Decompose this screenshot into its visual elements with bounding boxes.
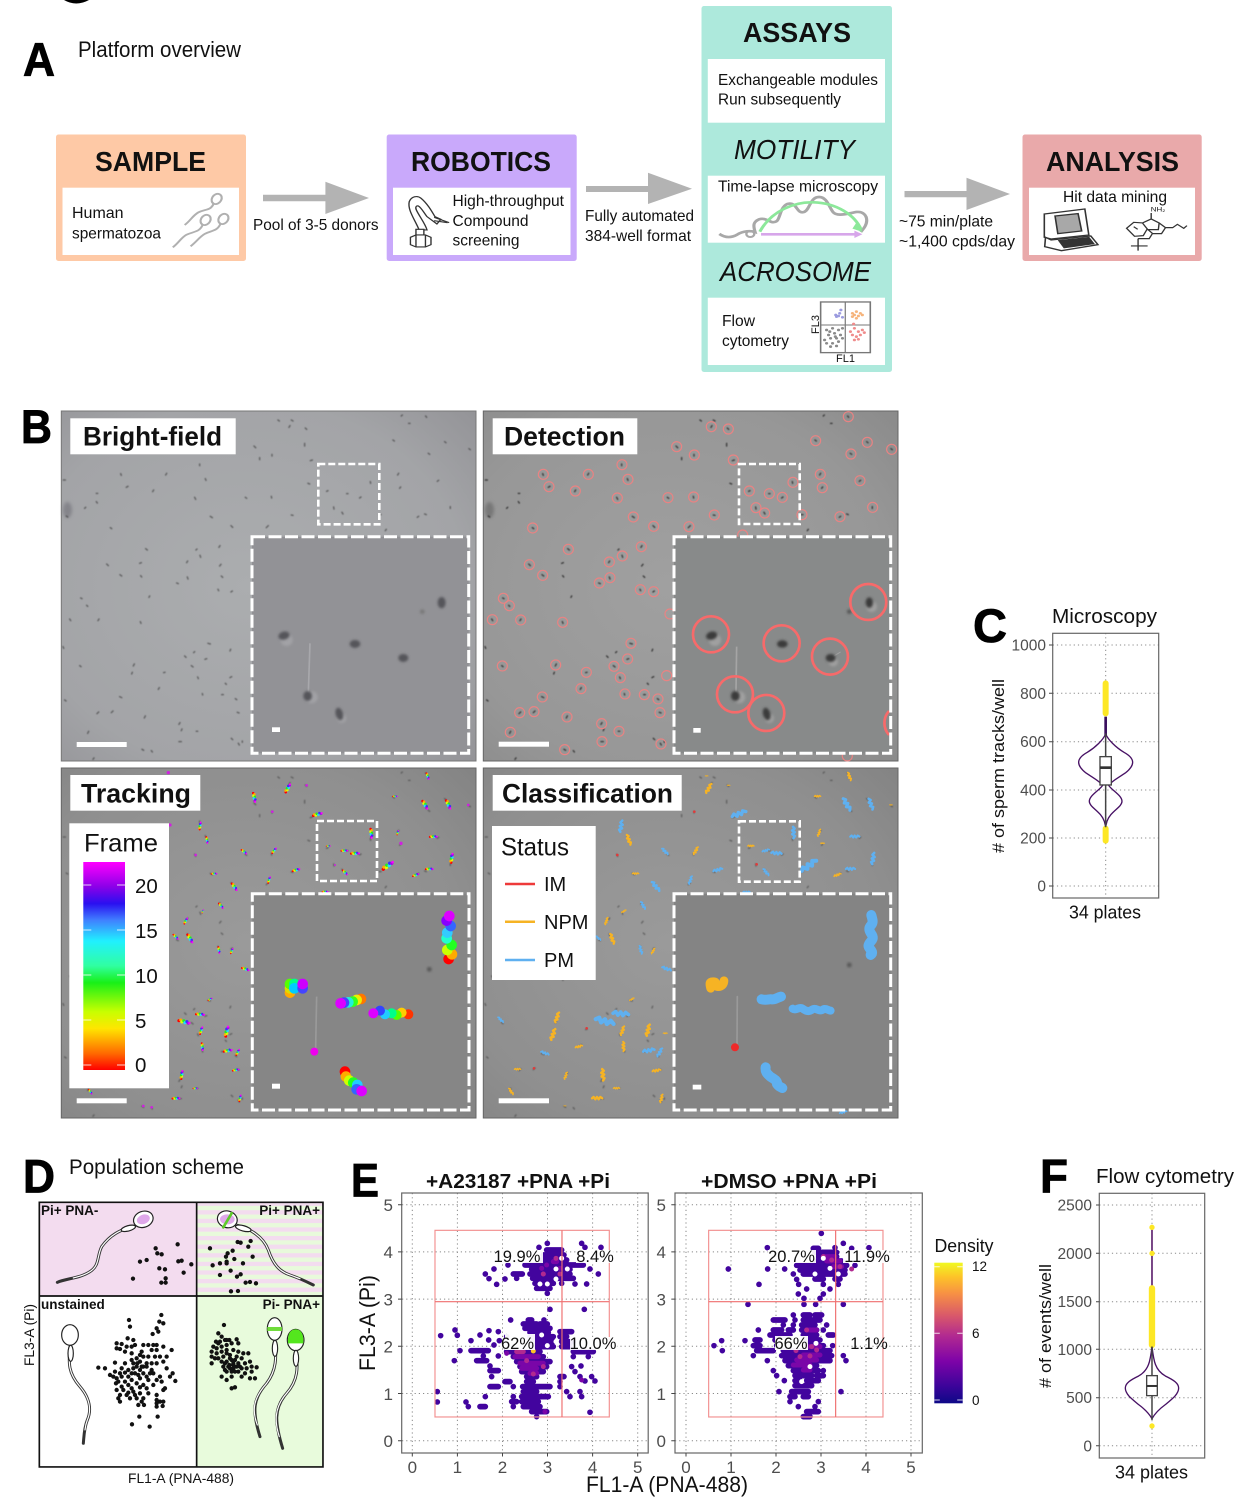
panel letter C: C bbox=[973, 599, 1007, 652]
panel letter B: B bbox=[21, 400, 52, 453]
axis tick labels: 5 bbox=[384, 1196, 393, 1215]
axis tick labels: 0 bbox=[408, 1458, 417, 1477]
y axis tick labels bbox=[1058, 1198, 1092, 1456]
legend: status: PM bbox=[544, 950, 574, 972]
axis tick labels: 2 bbox=[771, 1458, 781, 1477]
axis tick labels: 1 bbox=[453, 1458, 462, 1477]
plot title: DMSO: +DMSO +PNA +Pi bbox=[701, 1171, 877, 1193]
box: assays: Time-lapse microscopy bbox=[718, 178, 878, 196]
image: tracking bbox=[61, 768, 476, 1118]
box: robotics: Compound bbox=[452, 213, 528, 230]
icon: sperm cells bbox=[173, 192, 230, 247]
y axis tick labels: 0 bbox=[1083, 1438, 1092, 1456]
axis tick labels: 0 bbox=[657, 1432, 666, 1451]
box: robotics: High-throughput bbox=[452, 193, 565, 210]
legend: status: NPM bbox=[544, 912, 588, 934]
label: detection: Detection bbox=[504, 422, 625, 452]
y axis tick labels: 2000 bbox=[1058, 1246, 1092, 1263]
quadrant: Pi- PNA+ bbox=[197, 1296, 323, 1467]
sperm illustrations bbox=[57, 1208, 313, 1448]
arrow: robotics to assays bbox=[586, 173, 692, 204]
panel E: flow cytometry density plots bbox=[351, 1154, 994, 1497]
axis tick labels: 2 bbox=[384, 1338, 393, 1356]
icon: robot arm bbox=[409, 197, 449, 247]
heading: microscopy: Microscopy bbox=[1052, 606, 1157, 628]
arrow: sample to robotics bbox=[263, 182, 369, 214]
density plot: A23187 bbox=[398, 1193, 648, 1456]
box: sample bbox=[56, 134, 246, 261]
arrow: assays to analysis bbox=[904, 178, 1010, 210]
icon: computer bbox=[1044, 209, 1098, 251]
percentage labels bbox=[494, 1248, 617, 1353]
axis tick labels: 3 bbox=[657, 1290, 666, 1310]
image: bright-field bbox=[61, 411, 476, 761]
box: robotics: screening bbox=[452, 232, 520, 250]
box: analysis: ANALYSIS bbox=[1046, 146, 1179, 177]
label: pool of donors: Pool of 3-5 donors bbox=[253, 217, 378, 234]
x axis label: 34 plates bbox=[1069, 902, 1141, 922]
label: throughput: ~1,400 cpds/day bbox=[899, 234, 1015, 250]
hexbin points bbox=[714, 1233, 869, 1417]
quadrant chart bbox=[39, 1202, 323, 1467]
y axis tick labels: 1000 bbox=[1012, 638, 1046, 654]
legend: frame colour bar: 10 bbox=[135, 965, 158, 988]
label: fully automated: Fully automated bbox=[585, 208, 694, 225]
y axis tick labels: 1500 bbox=[1058, 1294, 1092, 1311]
axis tick labels: 1 bbox=[384, 1385, 393, 1404]
box: robotics bbox=[387, 134, 577, 261]
panel letter E: E bbox=[351, 1154, 379, 1206]
percentage labels: 19.9% bbox=[494, 1248, 541, 1266]
legend: density colour bar: Density bbox=[934, 1236, 994, 1256]
axis tick labels: 0 bbox=[681, 1458, 691, 1477]
label: bright-field: Bright-field bbox=[83, 422, 222, 452]
image: detection bbox=[483, 411, 898, 761]
panel D: population scheme bbox=[21, 1150, 323, 1486]
box: assays: Run subsequently bbox=[718, 92, 841, 108]
gate rectangles bbox=[709, 1230, 883, 1417]
icon: molecule: NH₂ bbox=[1151, 205, 1166, 213]
clipped glyph at top edge bbox=[64, 0, 89, 4]
y axis tick labels: 2500 bbox=[1058, 1198, 1092, 1214]
axis tick labels: 4 bbox=[384, 1243, 393, 1262]
percentage labels: 20.7% bbox=[768, 1248, 815, 1266]
box: assays: cytometry bbox=[722, 333, 789, 350]
rainbow tracks bbox=[87, 771, 470, 1109]
box: analysis: Hit data mining bbox=[1063, 189, 1167, 206]
heading: population scheme: Population scheme bbox=[69, 1156, 244, 1179]
box: assays: Flow bbox=[722, 313, 755, 330]
image: classification bbox=[483, 768, 898, 1118]
panel F: flow cytometry violin plot bbox=[1036, 1150, 1234, 1482]
percentage labels: 11.9% bbox=[844, 1248, 890, 1266]
box: assays: MOTILITY bbox=[734, 134, 857, 165]
quadrant labels: Pi- PNA+ bbox=[263, 1297, 320, 1312]
hexbin points bbox=[437, 1243, 601, 1417]
legend: frame colour bar bbox=[69, 823, 169, 1088]
box: assays: Exchangeable modules bbox=[718, 72, 878, 89]
axis tick labels: 4 bbox=[861, 1458, 871, 1477]
axis tick labels: 5 bbox=[906, 1458, 916, 1477]
plot title: A23187: +A23187 +PNA +Pi bbox=[426, 1171, 610, 1193]
box: analysis bbox=[1022, 134, 1202, 261]
heading: flow cytometry: Flow cytometry bbox=[1096, 1166, 1234, 1188]
icon: molecule bbox=[1127, 205, 1187, 251]
heading: platform overview: Platform overview bbox=[78, 37, 241, 62]
axis tick labels: 5 bbox=[657, 1196, 666, 1215]
panel C: microscopy violin plot bbox=[973, 599, 1159, 922]
quadrant: unstained bbox=[39, 1296, 197, 1467]
density plot: DMSO bbox=[671, 1193, 922, 1456]
panel letter F: F bbox=[1040, 1150, 1068, 1202]
label: fully automated: 384-well format bbox=[585, 228, 692, 245]
plot frame and grid bbox=[1096, 1193, 1205, 1458]
label: detection bbox=[493, 418, 637, 454]
percentage labels bbox=[768, 1248, 890, 1353]
box: assays bbox=[702, 6, 892, 372]
panel letter A: A bbox=[23, 33, 55, 86]
box: sample: Human bbox=[72, 205, 124, 222]
quadrant labels bbox=[41, 1203, 320, 1312]
quadrant labels: Pi+ PNA+ bbox=[259, 1203, 320, 1218]
quadrant: Pi+ PNA+ bbox=[197, 1202, 323, 1296]
axis tick labels: 2 bbox=[498, 1458, 507, 1477]
x axis title: FL1-A (PNA-488) bbox=[128, 1470, 234, 1486]
y axis title: # of sperm tracks/well bbox=[989, 679, 1008, 853]
mini flow cytometry plot bbox=[810, 302, 870, 365]
y axis tick labels: 400 bbox=[1020, 782, 1046, 800]
quadrant labels: Pi+ PNA- bbox=[41, 1203, 98, 1218]
inset rainbow tracks bbox=[285, 911, 457, 1096]
axis tick labels: 1 bbox=[726, 1458, 736, 1477]
legend: frame colour bar: 20 bbox=[135, 875, 158, 898]
legend: density colour bar bbox=[934, 1236, 994, 1408]
violin bbox=[1125, 1225, 1179, 1429]
legend: frame colour bar: 0 bbox=[135, 1054, 146, 1077]
legend: status: IM bbox=[544, 874, 566, 896]
axis tick labels: 4 bbox=[588, 1458, 597, 1477]
label: fully automated bbox=[585, 208, 694, 245]
classified tracks bbox=[498, 772, 892, 1114]
y axis title: # of events/well bbox=[1036, 1264, 1055, 1388]
inset detected sperm bbox=[693, 584, 886, 731]
y axis tick labels: 600 bbox=[1020, 734, 1046, 751]
axis tick labels: 3 bbox=[816, 1458, 826, 1477]
axis tick labels bbox=[384, 1196, 916, 1477]
y axis title: FL3-A (Pi) bbox=[21, 1304, 37, 1366]
legend: density colour bar: 0 bbox=[972, 1393, 980, 1408]
violin bbox=[1079, 683, 1133, 841]
y axis tick labels: 500 bbox=[1066, 1390, 1092, 1407]
axis tick labels: 4 bbox=[657, 1243, 666, 1262]
panel A: platform overview bbox=[23, 6, 1202, 372]
axis tick labels: 3 bbox=[543, 1458, 552, 1477]
percentage labels: 62% bbox=[501, 1335, 534, 1353]
x axis title: FL1-A (PNA-488) bbox=[586, 1472, 748, 1497]
y axis tick labels: 0 bbox=[1037, 878, 1046, 896]
y axis tick labels: 1000 bbox=[1058, 1342, 1092, 1359]
box: assays: ASSAYS bbox=[743, 17, 851, 48]
box: assays: ACROSOME bbox=[718, 256, 871, 287]
label: throughput: ~75 min/plate bbox=[899, 214, 993, 230]
y axis tick labels: 800 bbox=[1020, 686, 1046, 703]
box: robotics: ROBOTICS bbox=[411, 146, 551, 177]
box: sample: spermatozoa bbox=[72, 226, 161, 242]
quadrant labels: unstained bbox=[41, 1297, 105, 1312]
percentage labels: 1.1% bbox=[850, 1335, 888, 1353]
label: classification: Classification bbox=[502, 779, 673, 809]
inset sperm heads bbox=[277, 597, 446, 723]
scatter dots bbox=[98, 1241, 257, 1427]
box: sample: SAMPLE bbox=[95, 146, 206, 177]
legend: frame colour bar: Frame bbox=[84, 830, 158, 858]
axis tick labels: 3 bbox=[384, 1290, 393, 1310]
panel B: microscopy images bbox=[21, 400, 898, 1118]
inset classified tracks bbox=[710, 915, 873, 1088]
percentage labels: 10.0% bbox=[570, 1335, 617, 1353]
legend: density colour bar: 6 bbox=[972, 1326, 980, 1341]
y axis tick labels bbox=[1012, 638, 1046, 896]
percentage labels: 66% bbox=[774, 1335, 808, 1353]
detection circles bbox=[487, 412, 897, 761]
panel letter D: D bbox=[23, 1150, 55, 1202]
y axis title: FL3-A (Pi) bbox=[355, 1275, 380, 1371]
legend: density colour bar: 12 bbox=[972, 1259, 987, 1274]
mini flow cytometry plot: FL3 bbox=[810, 315, 822, 334]
quadrant frame bbox=[39, 1202, 323, 1467]
label: throughput bbox=[899, 214, 1015, 250]
axis tick labels: 1 bbox=[657, 1385, 666, 1404]
percentage labels: 8.4% bbox=[576, 1248, 614, 1266]
x axis label: 34 plates bbox=[1115, 1462, 1188, 1482]
axis tick labels: 5 bbox=[633, 1458, 642, 1477]
legend: status: Status bbox=[501, 834, 569, 862]
quadrant: Pi+ PNA- bbox=[39, 1202, 197, 1296]
y axis tick labels: 200 bbox=[1020, 830, 1046, 848]
gate rectangles bbox=[435, 1230, 609, 1417]
legend: frame colour bar: 5 bbox=[135, 1010, 146, 1033]
label: tracking: Tracking bbox=[81, 779, 191, 809]
mini flow cytometry plot: FL1 bbox=[836, 353, 855, 365]
plot frame and grid bbox=[1049, 633, 1159, 898]
axis tick labels: 2 bbox=[657, 1338, 666, 1356]
legend: status bbox=[492, 826, 596, 980]
axis tick labels: 0 bbox=[384, 1432, 393, 1451]
motility diagram bbox=[719, 197, 867, 238]
legend: frame colour bar: 15 bbox=[135, 920, 158, 943]
